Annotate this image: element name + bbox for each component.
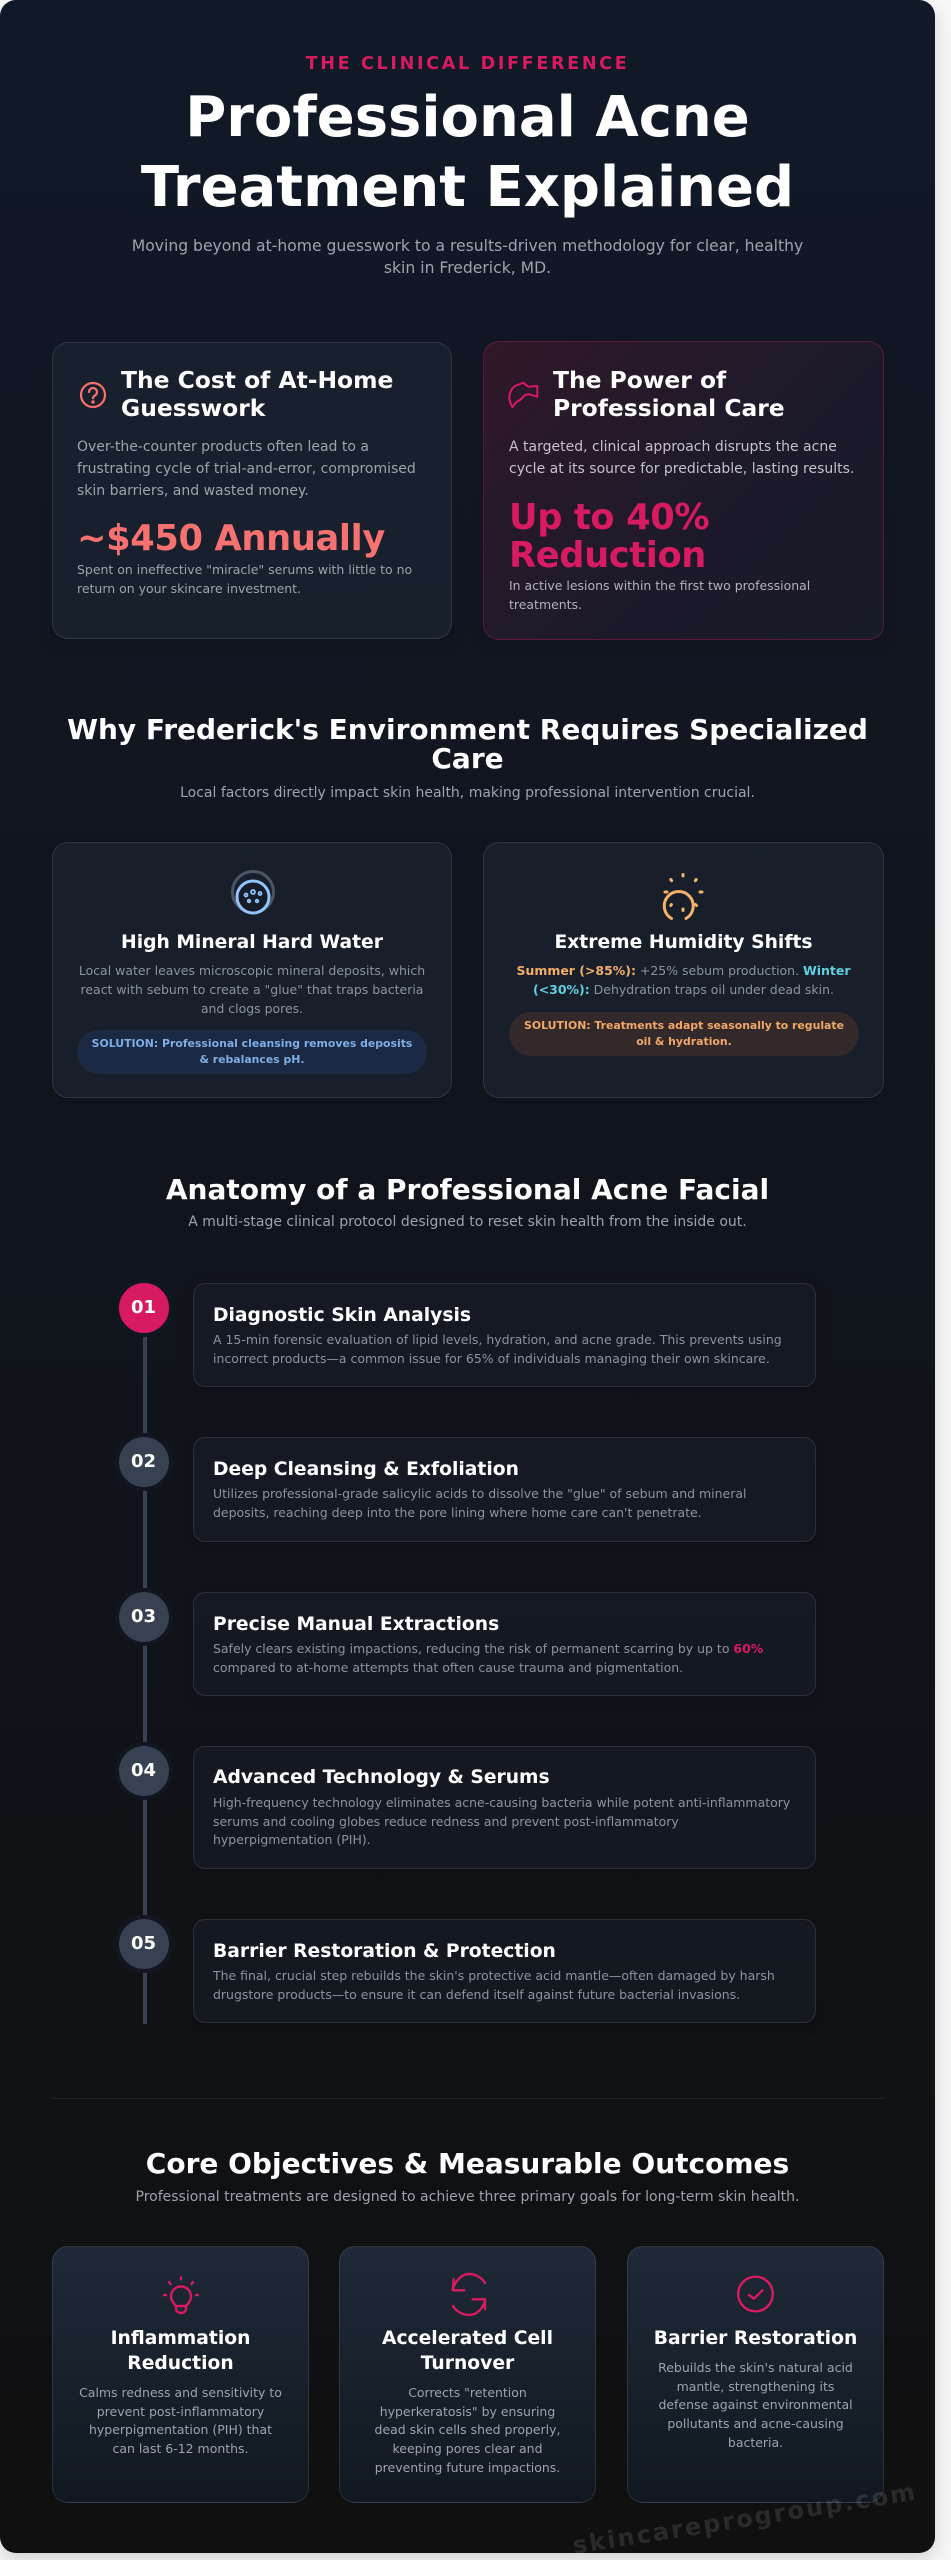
step 2 text: [213, 1486, 746, 1520]
description: [658, 2360, 853, 2450]
description: [77, 439, 416, 499]
description: pollutants and acne-causing: [667, 2416, 844, 2431]
stat: annual cost: ~$450 Annually: [77, 518, 385, 559]
heading: Turnover: [421, 2353, 514, 2374]
solution pill: [77, 1030, 427, 1074]
description: cycle at its source for predictable, lasting results.: [509, 461, 854, 477]
header: eyebrow label: THE CLINICAL DIFFERENCE: [306, 54, 629, 74]
heading: [111, 2328, 250, 2374]
step 4 card: [193, 1746, 816, 1869]
description: bacteria.: [728, 2435, 783, 2450]
step 2 card: [193, 1437, 816, 1542]
step 5 text: The final, crucial step rebuilds the skin's protective acid mantle—often damaged by harsh: [213, 1968, 775, 1983]
stat caption: treatments.: [509, 597, 582, 612]
description: preventing future impactions.: [375, 2460, 560, 2475]
step 2 text: deposits, reaching deep into the pore lining where home care can't penetrate.: [213, 1505, 702, 1520]
step 1 number: 01: [131, 1297, 156, 1318]
icon: lightbulb: [162, 2276, 200, 2314]
description: Corrects "retention: [408, 2385, 527, 2400]
step 4 text: serums and cooling globes reduce redness and prevent post-inflammatory: [213, 1814, 679, 1829]
heading: Barrier Restoration: [654, 2328, 857, 2349]
section subtitle: anatomy: A multi-stage clinical protocol designed to reset skin health from the inside out.: [188, 1214, 747, 1230]
solution pill: [509, 1012, 859, 1056]
step 2 number: 02: [131, 1451, 156, 1472]
step 4 text: [213, 1795, 790, 1847]
step 5 text: drugstore products—to ensure it can defend itself against future bacterial invasions.: [213, 1987, 740, 2002]
solution pill: SOLUTION: Professional cleansing removes deposits: [92, 1037, 412, 1050]
stat: reduction: Reduction: [509, 534, 706, 576]
timeline: [143, 1336, 147, 2024]
heading: Reduction: [127, 2353, 234, 2374]
heading: [553, 366, 785, 422]
description: and clogs pores.: [201, 1001, 303, 1016]
description: [79, 963, 425, 1016]
description: A targeted, clinical approach disrupts the acne: [509, 439, 837, 455]
icon: refresh arrows: [452, 2272, 486, 2316]
panel: cost of at-home guesswork: [52, 342, 452, 639]
subtitle: [132, 237, 803, 277]
icon: sun humidity: [662, 873, 704, 920]
step 2 heading: Deep Cleansing & Exfoliation: [213, 1459, 519, 1480]
description: Over-the-counter products often lead to a: [77, 439, 369, 455]
description: dead skin cells shed properly,: [375, 2422, 560, 2437]
description: Local water leaves microscopic mineral deposits, which: [79, 963, 425, 978]
step 5 number: [118, 1919, 168, 1969]
stat caption: Spent on ineffective "miracle" serums with little to no: [77, 562, 412, 577]
step 1 heading: Diagnostic Skin Analysis: [213, 1305, 471, 1326]
step 1 text: A 15-min forensic evaluation of lipid levels, hydration, and acne grade. This prevents using: [213, 1332, 782, 1347]
stat caption: [77, 562, 412, 596]
panel: power of professional care: [483, 341, 884, 640]
step 3 text: compared to at-home attempts that often cause trauma and pigmentation.: [213, 1660, 683, 1675]
step 1 text: [213, 1332, 782, 1366]
description: react with sebum to create a "glue" that traps bacteria: [81, 982, 423, 997]
heading: The Power of: [553, 366, 726, 394]
icon: question circle: [80, 382, 106, 408]
title: Treatment Explained: [141, 155, 794, 220]
step 4 number: [118, 1746, 168, 1796]
subtitle: skin in Frederick, MD.: [384, 259, 551, 277]
title: Professional Acne: [185, 85, 750, 150]
panel: barrier restoration: [627, 2246, 884, 2503]
description: frustrating cycle of trial-and-error, compromised: [77, 461, 416, 477]
heading: The Cost of At-Home: [121, 366, 393, 394]
section heading: environment: [67, 713, 868, 775]
step 1 card: [193, 1283, 816, 1387]
description: Summer (>85%): +25% sebum production. Winter: [516, 963, 850, 978]
title: [141, 85, 794, 220]
step 3 text: Safely clears existing impactions, reducing the risk of permanent scarring by up to 60%: [213, 1641, 763, 1656]
heading: Professional Care: [553, 394, 785, 422]
heading: Guesswork: [121, 394, 265, 422]
step 4 text: High-frequency technology eliminates acne-causing bacteria while potent anti-inflammatory: [213, 1795, 790, 1810]
section subtitle: outcomes: Professional treatments are designed to achieve three primary goals for long-term skin health.: [136, 2189, 800, 2205]
step 5 text: [212, 1968, 775, 2002]
description: [79, 2385, 282, 2456]
section heading: environment: Why Frederick's Environment Requires Specialized: [67, 713, 868, 746]
description: defense against environmental: [658, 2397, 853, 2412]
heading: High Mineral Hard Water: [121, 932, 383, 953]
heading: Extreme Humidity Shifts: [554, 932, 813, 953]
icon: water drops: [231, 870, 275, 914]
description: Rebuilds the skin's natural acid: [658, 2360, 853, 2375]
step 5 number: 05: [131, 1933, 156, 1954]
heading: [382, 2328, 553, 2374]
stat caption: return on your skincare investment.: [77, 581, 301, 596]
step 3 text: [213, 1641, 763, 1675]
description: mantle, strengthening its: [677, 2379, 834, 2394]
step 5 card: [193, 1919, 816, 2023]
step 2 number: [118, 1437, 168, 1487]
step 3 heading: Precise Manual Extractions: [213, 1614, 499, 1635]
stat caption: [509, 578, 810, 612]
section heading: outcomes: Core Objectives & Measurable Outcomes: [146, 2147, 789, 2180]
stat: reduction: Up to 40%: [509, 497, 709, 538]
section heading: environment: Care: [431, 742, 504, 775]
icon: check circle: [737, 2276, 774, 2312]
solution pill: oil & hydration.: [636, 1035, 732, 1048]
step 1 number: [118, 1283, 168, 1333]
description: keeping pores clear and: [392, 2441, 542, 2456]
description: [509, 439, 854, 477]
description: can last 6-12 months.: [112, 2441, 248, 2456]
subtitle: Moving beyond at-home guesswork to a results-driven methodology for clear, healthy: [132, 237, 803, 255]
stat caption: In active lesions within the first two professional: [509, 578, 810, 593]
heading: [121, 366, 393, 422]
icon: hand outline: [508, 382, 538, 408]
description: (<30%): Dehydration traps oil under dead skin.: [533, 982, 834, 997]
stat: reduction: [509, 497, 709, 576]
step 3 number: [118, 1592, 168, 1642]
section subtitle: environment: Local factors directly impact skin health, making professional intervention crucial.: [180, 785, 755, 801]
panel: humidity: [483, 842, 884, 1098]
section heading: anatomy: Anatomy of a Professional Acne Facial: [166, 1173, 769, 1206]
description: Calms redness and sensitivity to: [79, 2385, 282, 2400]
step 1 text: incorrect products—a common issue for 65% of individuals managing their own skincare.: [213, 1351, 770, 1366]
timeline line: [143, 1313, 147, 2024]
step 3 card: [193, 1592, 816, 1696]
solution pill: & rebalances pH.: [199, 1053, 305, 1066]
description: hyperpigmentation (PIH) that: [89, 2422, 272, 2437]
description: [375, 2385, 560, 2475]
heading: Inflammation: [111, 2328, 250, 2349]
step 3 number: 03: [131, 1606, 156, 1627]
step 4 heading: Advanced Technology & Serums: [213, 1767, 550, 1788]
step 4 number: 04: [131, 1760, 156, 1781]
panel: inflammation reduction: [52, 2246, 309, 2503]
panel: hard water: [52, 842, 452, 1098]
description: prevent post-inflammatory: [97, 2404, 264, 2419]
step 2 text: Utilizes professional-grade salicylic acids to dissolve the "glue" of sebum and mineral: [213, 1486, 746, 1501]
solution pill: SOLUTION: Treatments adapt seasonally to regulate: [524, 1019, 844, 1032]
description: hyperkeratosis" by ensuring: [380, 2404, 555, 2419]
step 4 text: hyperpigmentation (PIH).: [213, 1832, 371, 1847]
step 5 heading: Barrier Restoration & Protection: [213, 1941, 556, 1962]
description: [516, 963, 850, 997]
heading: Accelerated Cell: [382, 2328, 553, 2349]
description: skin barriers, and wasted money.: [77, 483, 309, 499]
panel: accelerated cell turnover: [339, 2246, 596, 2503]
